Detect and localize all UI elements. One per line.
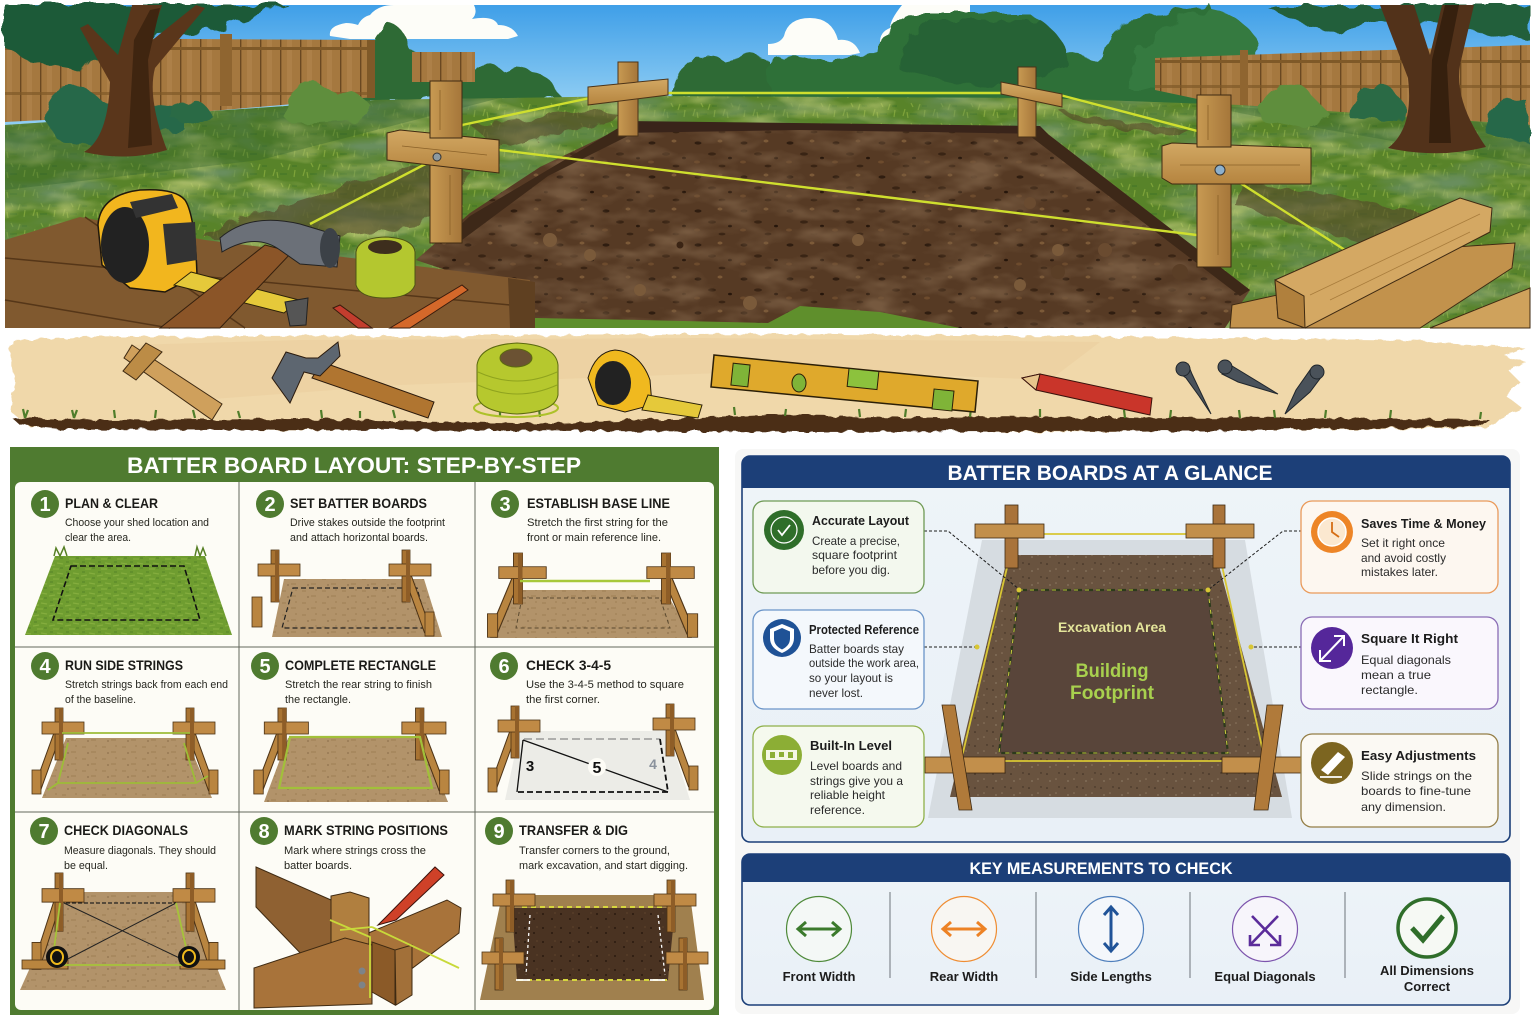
card: built-in level: [753, 726, 924, 827]
rocks: [543, 197, 1188, 310]
step 1: clear the area.: [65, 532, 131, 544]
card: built-in level: reliable height: [810, 788, 886, 802]
step 4: [31, 652, 228, 798]
card: easy adjustments: Slide strings on the: [1361, 769, 1472, 783]
step 9: mark excavation, and start digging.: [519, 860, 688, 872]
icon: ruler: [1311, 742, 1353, 784]
step 7: 7: [38, 821, 50, 843]
tree right: [1265, 5, 1530, 153]
front right batter board: [1162, 95, 1311, 267]
step 2: Drive stakes outside the footprint: [290, 517, 445, 529]
step 7: [20, 817, 226, 990]
panel: backyard hero scene: [5, 5, 1530, 330]
card: easy adjustments: any dimension.: [1361, 800, 1446, 814]
card: easy adjustments: [1301, 734, 1498, 827]
card: protected reference: never lost.: [809, 686, 863, 700]
back left post: [975, 505, 1044, 568]
step 1: Choose your shed location and: [65, 517, 209, 529]
back left batter board: [588, 62, 668, 136]
step 3: [487, 490, 698, 638]
card: saves time and money: mistakes later.: [1361, 565, 1438, 579]
step 4: Stretch strings back from each end: [65, 679, 228, 691]
measure: equal diagonals: Equal Diagonals: [1214, 969, 1316, 984]
tool: cross stake: [123, 343, 222, 420]
grass sprigs: [23, 407, 1481, 419]
measure: equal diagonals: [1214, 896, 1316, 984]
step 8: batter boards.: [284, 860, 352, 872]
heading: key measurements: KEY MEASUREMENTS TO CHECK: [970, 859, 1233, 878]
step 9: 9: [493, 821, 505, 843]
label: excavation area: Excavation Area: [1058, 620, 1166, 635]
card: easy adjustments: Easy Adjustments: [1361, 748, 1476, 763]
step 2: [252, 490, 445, 637]
label: building footprint: Building: [1076, 661, 1148, 682]
step 5: Stretch the rear string to finish: [285, 679, 432, 691]
step 5: 5: [259, 656, 271, 678]
tool: spirit level: [711, 355, 978, 412]
tool: string spool: [356, 237, 415, 298]
step 8: Mark where strings cross the: [284, 845, 426, 857]
soil patches in lawn: [205, 110, 1430, 245]
panel: key measurements: [742, 854, 1510, 1005]
step 8: MARK STRING POSITIONS: [284, 822, 448, 838]
icon: level: [762, 735, 802, 775]
step 2: and attach horizontal boards.: [290, 532, 428, 544]
card: accurate layout: before you dig.: [812, 563, 890, 577]
step 3: ESTABLISH BASE LINE: [527, 495, 670, 511]
step 6: 5: [593, 760, 602, 777]
step 6: [488, 652, 698, 800]
step 6: the first corner.: [526, 694, 600, 706]
stacked lumber: [1230, 198, 1530, 328]
heading: at a glance: BATTER BOARDS AT A GLANCE: [948, 462, 1272, 485]
card: square it right: [1301, 617, 1498, 709]
card: built-in level: Built-In Level: [810, 738, 892, 753]
card: protected reference: Protected Reference: [809, 622, 919, 637]
left fence: [5, 38, 375, 122]
icon: clock: [1311, 511, 1353, 553]
icon: shield: [763, 619, 801, 657]
step 6: 4: [649, 756, 657, 772]
back right post: [1186, 505, 1254, 568]
background tree line: [358, 5, 1260, 105]
step 3: front or main reference line.: [527, 532, 661, 544]
card: square it right: Square It Right: [1361, 631, 1459, 646]
backdrop glow behind blue panels: [735, 449, 1520, 1014]
card: protected reference: outside the work area,: [809, 656, 919, 670]
wooden table: [5, 217, 535, 328]
step 5: COMPLETE RECTANGLE: [285, 657, 436, 673]
measure: side lengths: [1070, 896, 1152, 984]
tool: hammer: [160, 220, 340, 328]
far fence: [412, 52, 475, 82]
measure: all dimensions correct: Correct: [1404, 979, 1451, 994]
card: built-in level: reference.: [810, 803, 865, 817]
step 5: the rectangle.: [285, 694, 351, 706]
step 3: Stretch the first string for the: [527, 517, 668, 529]
tool: green string spool: [474, 343, 558, 417]
step 6: CHECK 3-4-5: [526, 657, 611, 673]
ground strip: [12, 415, 1490, 432]
measure: front width: [783, 896, 855, 984]
step 9: TRANSFER & DIG: [519, 822, 628, 838]
card: square it right: rectangle.: [1361, 683, 1418, 697]
step 5: [251, 652, 449, 802]
label: building footprint: Footprint: [1070, 683, 1155, 704]
measure: rear width: [930, 896, 998, 984]
step 8: [250, 817, 461, 1008]
step 7: Measure diagonals. They should: [64, 845, 216, 857]
connector lines: [924, 531, 1302, 647]
connector dots: [977, 590, 1251, 647]
step 4: RUN SIDE STRINGS: [65, 657, 183, 673]
card: accurate layout: Accurate Layout: [812, 513, 910, 528]
tool: red pencil: [1022, 374, 1152, 415]
panel: batter boards at a glance: [742, 456, 1510, 842]
bushes: [45, 83, 1530, 150]
card: accurate layout: [753, 501, 924, 593]
tool: tape measure: [588, 350, 702, 418]
card: protected reference: Batter boards stay: [809, 642, 904, 656]
step 7: CHECK DIAGONALS: [64, 822, 188, 838]
excavated dirt: [416, 124, 1250, 328]
tool: hammer: [272, 342, 434, 418]
measure: side lengths: Side Lengths: [1070, 969, 1152, 984]
back right batter board: [1001, 67, 1062, 137]
card: protected reference: so your layout is: [809, 671, 893, 685]
card: easy adjustments: boards to fine-tune: [1361, 784, 1471, 798]
card: accurate layout: Create a precise,: [812, 534, 900, 548]
step 1: 1: [39, 494, 51, 516]
panel: step-by-step: [10, 447, 719, 1015]
front left post: [925, 705, 1005, 810]
card: saves time and money: and avoid costly: [1361, 551, 1446, 565]
icon: target check: [764, 510, 804, 550]
card: saves time and money: Set it right once: [1361, 536, 1445, 550]
tree left: [5, 5, 290, 157]
card: saves time and money: [1301, 501, 1498, 593]
measure: rear width: Rear Width: [930, 969, 998, 984]
step 2: SET BATTER BOARDS: [290, 495, 427, 511]
step 4: of the baseline.: [65, 694, 136, 706]
step 6: Use the 3-4-5 method to square: [526, 679, 684, 691]
heading: step by step: BATTER BOARD LAYOUT: STEP-BY-STEP: [127, 453, 581, 478]
site diagram: [924, 505, 1302, 818]
step 3: 3: [499, 494, 511, 516]
step 6: 6: [498, 656, 510, 678]
card: square it right: mean a true: [1361, 668, 1431, 682]
right fence: [1155, 45, 1530, 125]
measure: all dimensions correct: [1380, 899, 1474, 994]
card: accurate layout: square footprint: [812, 548, 898, 562]
card: saves time and money: Saves Time & Money: [1361, 516, 1487, 531]
tool: three screws: [1176, 360, 1324, 414]
grass lawn: [5, 96, 1530, 328]
card: protected reference: [753, 610, 924, 709]
panel: tools strip: [10, 334, 1526, 432]
measure: all dimensions correct: All Dimensions: [1380, 963, 1474, 978]
measure: front width: Front Width: [783, 969, 855, 984]
card: built-in level: strings give you a: [810, 774, 903, 788]
step 6: 3: [526, 758, 534, 775]
front right post: [1222, 705, 1302, 810]
strings: [310, 90, 1345, 250]
step 1: PLAN & CLEAR: [65, 495, 158, 511]
front left batter board: [387, 81, 499, 243]
card: square it right: Equal diagonals: [1361, 653, 1451, 667]
clouds: [330, 5, 1530, 55]
step 8: 8: [258, 821, 270, 843]
step 9: [480, 817, 708, 1000]
card: built-in level: Level boards and: [810, 759, 902, 773]
icon: diagonal arrow: [1311, 627, 1353, 669]
step 2: 2: [264, 494, 276, 516]
tool: tape measure: [98, 190, 308, 326]
step 7: be equal.: [64, 860, 108, 872]
tool: pencils: [333, 285, 468, 328]
step 9: Transfer corners to the ground,: [519, 845, 670, 857]
step 1: [25, 490, 232, 635]
step 4: 4: [39, 656, 51, 678]
